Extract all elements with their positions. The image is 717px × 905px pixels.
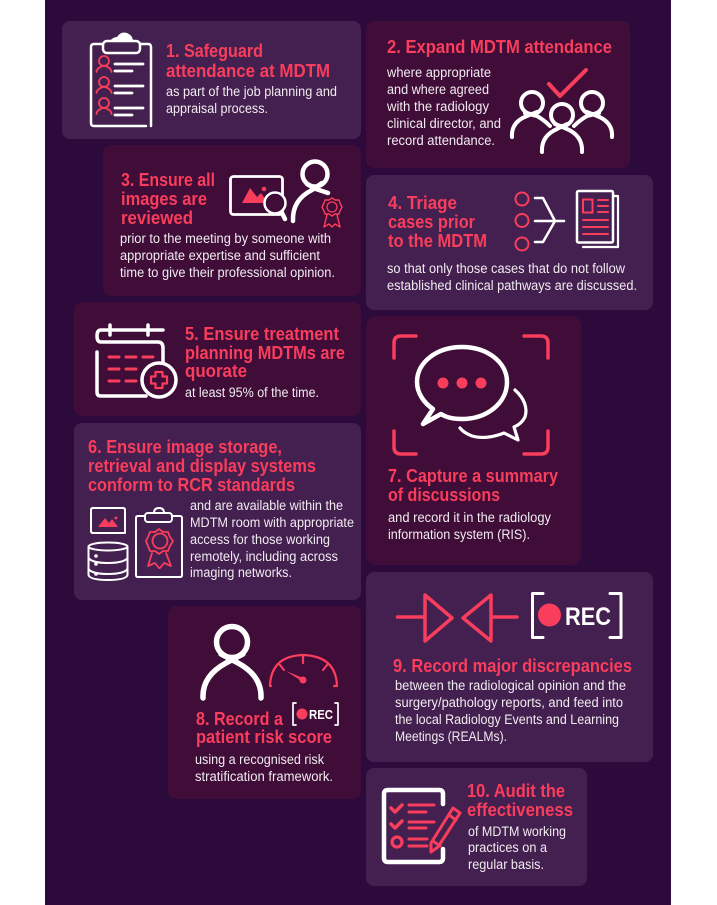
body text 6: MDTM room with appropriate [190, 515, 354, 530]
heading 3: 3. Ensure all [121, 169, 215, 190]
heading 4: 4. Triage [388, 192, 457, 213]
icon: recording frame brackets [394, 336, 548, 454]
icon: person with award rosette [293, 162, 342, 227]
body text 4: established clinical pathways are discussed. [387, 278, 637, 293]
panel 7: capture summary [366, 316, 581, 565]
panel 3: images reviewed [103, 145, 361, 296]
panel 2: expand attendance [366, 21, 630, 168]
body text 9: the local Radiology Events and Learning [395, 712, 619, 727]
body text 2: with the radiology [386, 99, 489, 114]
body text 6: and are available within the [190, 498, 343, 513]
heading 4: to the MDTM [388, 230, 487, 251]
body text 4: so that only those cases that do not follow [387, 261, 625, 276]
icon: REC badge [532, 594, 621, 638]
body text 6: remotely, including across [190, 549, 338, 564]
body text 7: information system (RIS). [388, 527, 530, 542]
body text 7: and record it in the radiology [388, 510, 551, 525]
icon: image under magnifier [230, 176, 286, 219]
panel 1: safeguard attendance [62, 21, 361, 139]
heading 3: reviewed [121, 207, 193, 228]
heading 5 [185, 323, 345, 381]
body text 6 [190, 498, 354, 580]
heading 6 [88, 436, 316, 495]
body text 9: Meetings (REALMs). [395, 729, 507, 744]
body text 2: and where agreed [387, 82, 489, 97]
heading 6: 6. Ensure image storage, [88, 436, 282, 457]
heading 8 [196, 708, 332, 747]
icon: risk gauge [270, 655, 337, 686]
icon: triage flow into document [516, 191, 618, 250]
heading 4 [388, 192, 487, 251]
body text 3: prior to the meeting by someone with [120, 231, 331, 246]
body text 6: imaging networks. [190, 565, 292, 580]
body text 1: appraisal process. [166, 101, 268, 116]
panel 6: image storage standards [74, 423, 361, 600]
heading 6: conform to RCR standards [88, 474, 295, 495]
panel 9: major discrepancies [366, 572, 653, 762]
body text 2 [386, 65, 501, 148]
icon: speech bubbles [417, 347, 526, 440]
icon: checklist with pencil [384, 790, 460, 862]
heading 7: of discussions [388, 484, 500, 505]
body text 10: practices on a [468, 840, 547, 855]
heading 7 [388, 465, 559, 505]
body text 1 [166, 84, 337, 116]
icon: person [203, 626, 261, 698]
body text 4 [387, 261, 637, 293]
icon: image frame [91, 508, 125, 533]
panel 4: triage cases [366, 175, 653, 310]
heading 8: patient risk score [196, 726, 332, 747]
heading 3 [121, 169, 215, 228]
body text 2: where appropriate [386, 65, 491, 80]
heading 10: 10. Audit the [467, 780, 565, 801]
icon: calendar with medical cross [97, 325, 176, 397]
heading 7: 7. Capture a summary [388, 465, 559, 486]
heading 1: 1. Safeguard [166, 40, 263, 61]
heading 1 [166, 40, 330, 81]
body text 9 [395, 678, 626, 744]
body text 3: appropriate expertise and sufficient [120, 248, 320, 263]
body text 10: of MDTM working [468, 824, 566, 839]
heading 10 [467, 780, 573, 820]
heading 5: planning MDTMs are [185, 342, 345, 363]
body text 8: using a recognised risk [195, 752, 324, 767]
body text 7 [388, 510, 551, 542]
icon: small REC badge [293, 703, 338, 725]
icon: clipboard with rosette [136, 508, 182, 577]
heading 5: quorate [185, 360, 247, 381]
body text 1: as part of the job planning and [166, 84, 337, 99]
heading 3: images are [121, 188, 207, 209]
icon: REC badge: REC [565, 603, 611, 631]
body text 10: regular basis. [468, 857, 544, 872]
heading 5: 5. Ensure treatment [185, 323, 339, 344]
body text 5: at least 95% of the time. [185, 385, 319, 400]
heading 4: cases prior [388, 211, 475, 232]
body text 3 [120, 231, 335, 280]
heading 9: 9. Record major discrepancies [393, 655, 632, 676]
body text 2: record attendance. [387, 133, 495, 148]
body text 8: stratification framework. [195, 769, 333, 784]
heading 1: attendance at MDTM [166, 60, 330, 81]
body text 2: clinical director, and [387, 116, 501, 131]
icon: three people with check mark [512, 70, 612, 152]
body text 8 [195, 752, 333, 784]
body text 6: access for those working [190, 532, 330, 547]
heading 8: 8. Record a [196, 708, 284, 729]
icon: opposing arrows [398, 595, 517, 641]
body text 9: surgery/pathology reports, and feed into [395, 695, 623, 710]
icon: clipboard with people [91, 32, 151, 126]
panel 8: patient risk score [168, 606, 361, 799]
body text 3: time to give their professional opinion. [120, 265, 335, 280]
icon: small REC badge: REC [309, 707, 334, 722]
heading 10: effectiveness [467, 799, 573, 820]
body text 9: between the radiological opinion and the [395, 678, 626, 693]
body text 10 [468, 824, 566, 872]
heading 2: 2. Expand MDTM attendance [387, 36, 612, 57]
icon: database [88, 542, 128, 580]
panel 5: quorate MDTMs [74, 302, 361, 416]
heading 6: retrieval and display systems [88, 455, 316, 476]
panel 10: audit effectiveness [366, 768, 587, 886]
